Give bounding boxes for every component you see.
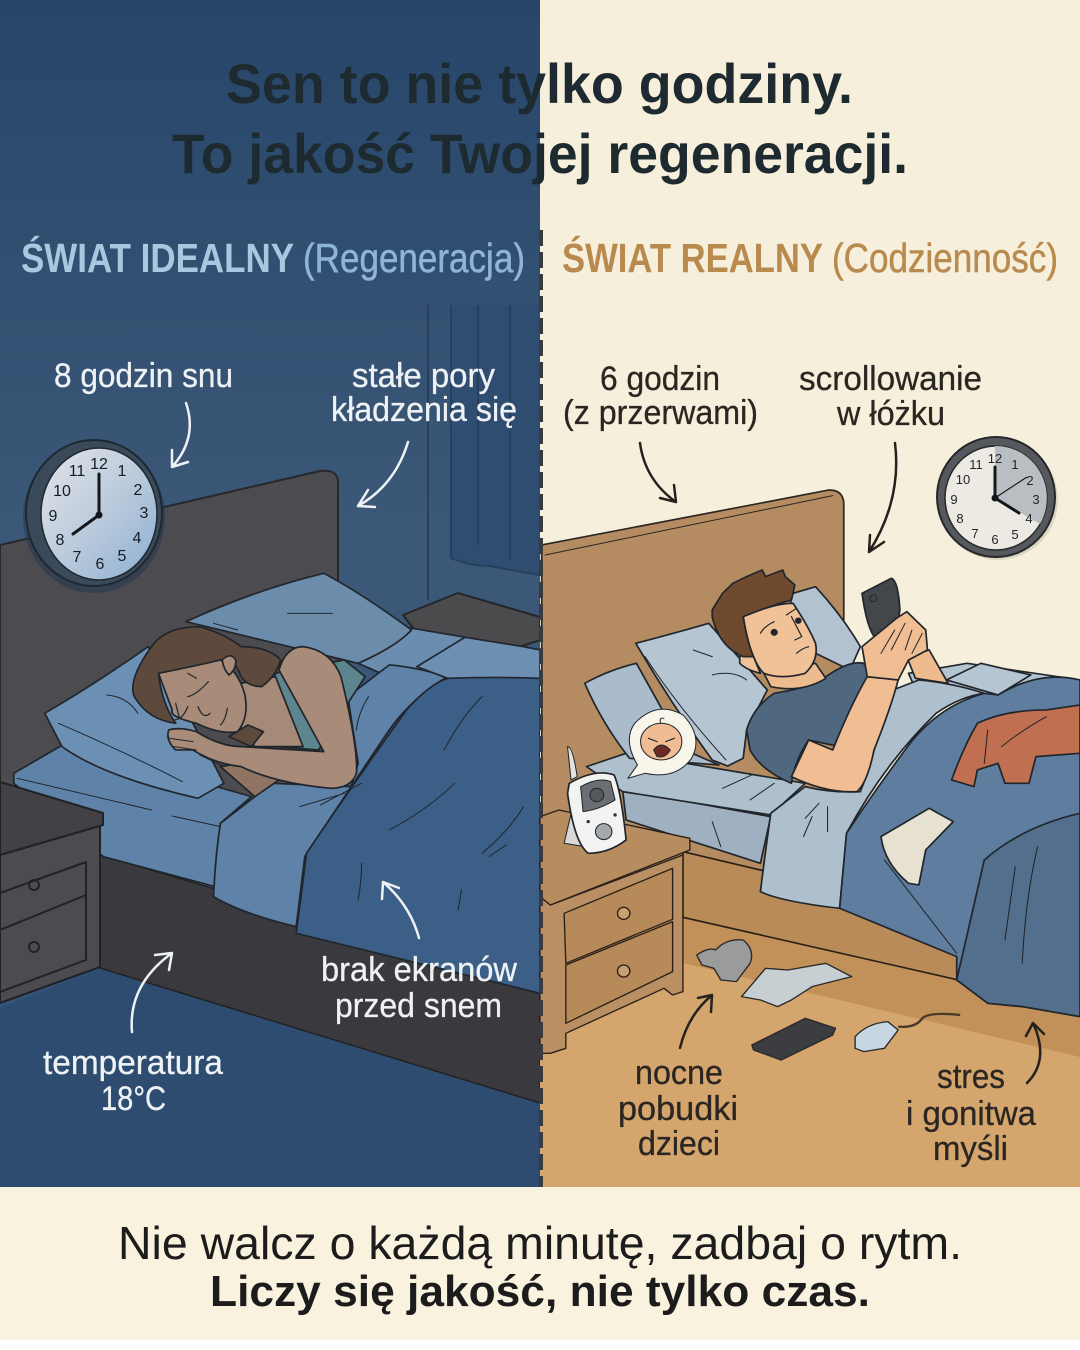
- labels: real world: myśli: [933, 1130, 1008, 1168]
- labels: real world: dzieci: [638, 1125, 720, 1163]
- tissue on blanket: [881, 808, 953, 885]
- mattress top: [586, 753, 805, 815]
- speech bubble with crying baby: [628, 709, 696, 778]
- clock: 8:00: 1: [118, 463, 127, 480]
- blanket: [840, 677, 1080, 1017]
- clock: 8:00: 3: [140, 505, 149, 522]
- labels: ideal world: 18°C: [101, 1080, 166, 1118]
- floor: [540, 900, 1080, 1187]
- heading: real world: [562, 235, 1058, 281]
- baby monitor: [564, 747, 626, 853]
- clothes on blanket: [952, 705, 1080, 787]
- footer text: Liczy się jakość, nie tylko czas.: [210, 1267, 870, 1316]
- neck: [764, 663, 826, 689]
- clock: 4:00 with shaded wedge: 1: [1011, 457, 1019, 472]
- ear: [740, 654, 760, 673]
- arrows: real world: [640, 443, 1044, 1083]
- clock: 8:00: 12: [90, 456, 108, 473]
- clock: 4:00 with shaded wedge: 8: [956, 511, 964, 526]
- clock: 4:00 with shaded wedge: 2: [1026, 473, 1034, 488]
- closed eyes, mouth: [174, 673, 227, 725]
- bed base: [683, 852, 988, 987]
- facial features: [760, 608, 809, 653]
- clock: 8:00: 6: [96, 556, 105, 573]
- clock: 4:00 with shaded wedge: 11: [969, 457, 983, 472]
- mattress side: [623, 790, 771, 863]
- clock: 8:00: 5: [118, 548, 127, 565]
- labels: real world: stres: [937, 1058, 1005, 1096]
- title: To jakość Twojej regeneracji.: [172, 122, 908, 185]
- clock: 4:00 with shaded wedge: 12: [988, 451, 1002, 466]
- labels: ideal world: stałe pory: [352, 357, 495, 395]
- title: [172, 52, 908, 185]
- nightstand: [0, 782, 103, 1003]
- clock: 4:00 with shaded wedge: 5: [1011, 527, 1019, 542]
- labels: real world: nocne: [635, 1054, 723, 1092]
- hair: [712, 570, 795, 657]
- headboard: [0, 471, 338, 800]
- clock: 8:00: 7: [73, 549, 82, 566]
- clock: 4:00 with shaded wedge: 6: [991, 532, 999, 547]
- back forearm: [907, 650, 948, 683]
- tissue: [741, 963, 852, 1007]
- clock: 8:00: 4: [133, 530, 142, 547]
- light sheet: [760, 680, 984, 908]
- lower arm: [220, 763, 279, 797]
- footer text: [118, 1217, 962, 1316]
- clock: 8:00: 8: [56, 532, 65, 549]
- heading: ideal world: (Regeneracja): [303, 235, 525, 281]
- labels: ideal world: brak ekranów: [321, 951, 517, 989]
- clock: 8:00: 2: [134, 482, 143, 499]
- shirt: [747, 663, 884, 783]
- labels: real world: [563, 360, 1036, 1168]
- clock: 4:00 with shaded wedge: 9: [950, 492, 958, 507]
- pillow and sheet creases: [17, 613, 332, 827]
- dark blanket: [296, 677, 540, 993]
- clock: 4:00 with shaded wedge: 7: [971, 526, 979, 541]
- clock: 4:00 with shaded wedge: [937, 437, 1058, 560]
- panel: real world: [540, 0, 1080, 1187]
- labels: ideal world: kładzenia się: [331, 391, 517, 429]
- labels: real world: 6 godzin: [600, 360, 720, 398]
- clock: 8:00: 11: [69, 463, 85, 480]
- clock: 4:00 with shaded wedge: 4: [1025, 511, 1033, 526]
- title: Sen to nie tylko godziny.: [226, 52, 853, 115]
- labels: real world: (z przerwami): [563, 394, 758, 432]
- sheet creases: [712, 775, 828, 847]
- labels: ideal world: 8 godzin snu: [54, 357, 233, 395]
- arm: [791, 677, 898, 792]
- clock: 8:00: 9: [49, 508, 58, 525]
- labels: real world: pobudki: [618, 1090, 738, 1128]
- far nightstand: [403, 593, 540, 650]
- face: [743, 603, 816, 677]
- window and curtain: [428, 305, 540, 600]
- scene: man with phone: [585, 570, 1080, 1017]
- footer band: [0, 1187, 1080, 1340]
- front pillow: [45, 647, 224, 798]
- labels: real world: w łóżku: [836, 395, 945, 433]
- clock: 8:00: [23, 440, 165, 593]
- labels: ideal world: przed snem: [335, 987, 502, 1025]
- headboard: [542, 490, 844, 903]
- panel: ideal world: [0, 0, 540, 1187]
- labels: ideal world: [43, 357, 517, 1118]
- top: [255, 660, 365, 750]
- labels: real world: scrollowanie: [799, 360, 982, 398]
- back pillow: [186, 573, 412, 663]
- heading: ideal world: ŚWIAT IDEALNY: [21, 235, 294, 281]
- clock: 4:00 with shaded wedge: 10: [956, 472, 970, 487]
- nightstand with drawers: [540, 810, 690, 1053]
- divider: [539, 230, 543, 1187]
- phone on floor: [752, 1018, 835, 1060]
- hair: [133, 627, 281, 723]
- floor: [0, 968, 540, 1187]
- clock: 4:00 with shaded wedge: 3: [1032, 492, 1040, 507]
- floor clutter: [697, 940, 960, 1060]
- phone: [862, 578, 900, 638]
- face and neck: [241, 677, 303, 747]
- heading: real world: ŚWIAT REALNY: [562, 235, 823, 281]
- heading: ideal world: [21, 235, 525, 281]
- footer text: Nie walcz o każdą minutę, zadbaj o rytm.: [118, 1217, 962, 1269]
- arrows: ideal world: [132, 403, 419, 1032]
- back pillows: [781, 587, 860, 670]
- light sheet: [214, 665, 448, 927]
- arm: [168, 647, 357, 788]
- hands: [862, 612, 927, 680]
- labels: real world: i gonitwa: [906, 1095, 1036, 1133]
- bed base: [100, 855, 540, 1103]
- scene: sleeping woman: [14, 573, 540, 993]
- charger and cable: [855, 1022, 898, 1052]
- mattress: [14, 743, 251, 887]
- ear: [222, 656, 236, 675]
- baby monitor and speech bubble: [564, 709, 696, 853]
- crumpled tissue: [697, 940, 752, 982]
- clock: 8:00: 10: [53, 483, 71, 500]
- floor band: [683, 917, 1080, 1057]
- front pillow: [636, 623, 767, 766]
- labels: ideal world: temperatura: [43, 1044, 223, 1082]
